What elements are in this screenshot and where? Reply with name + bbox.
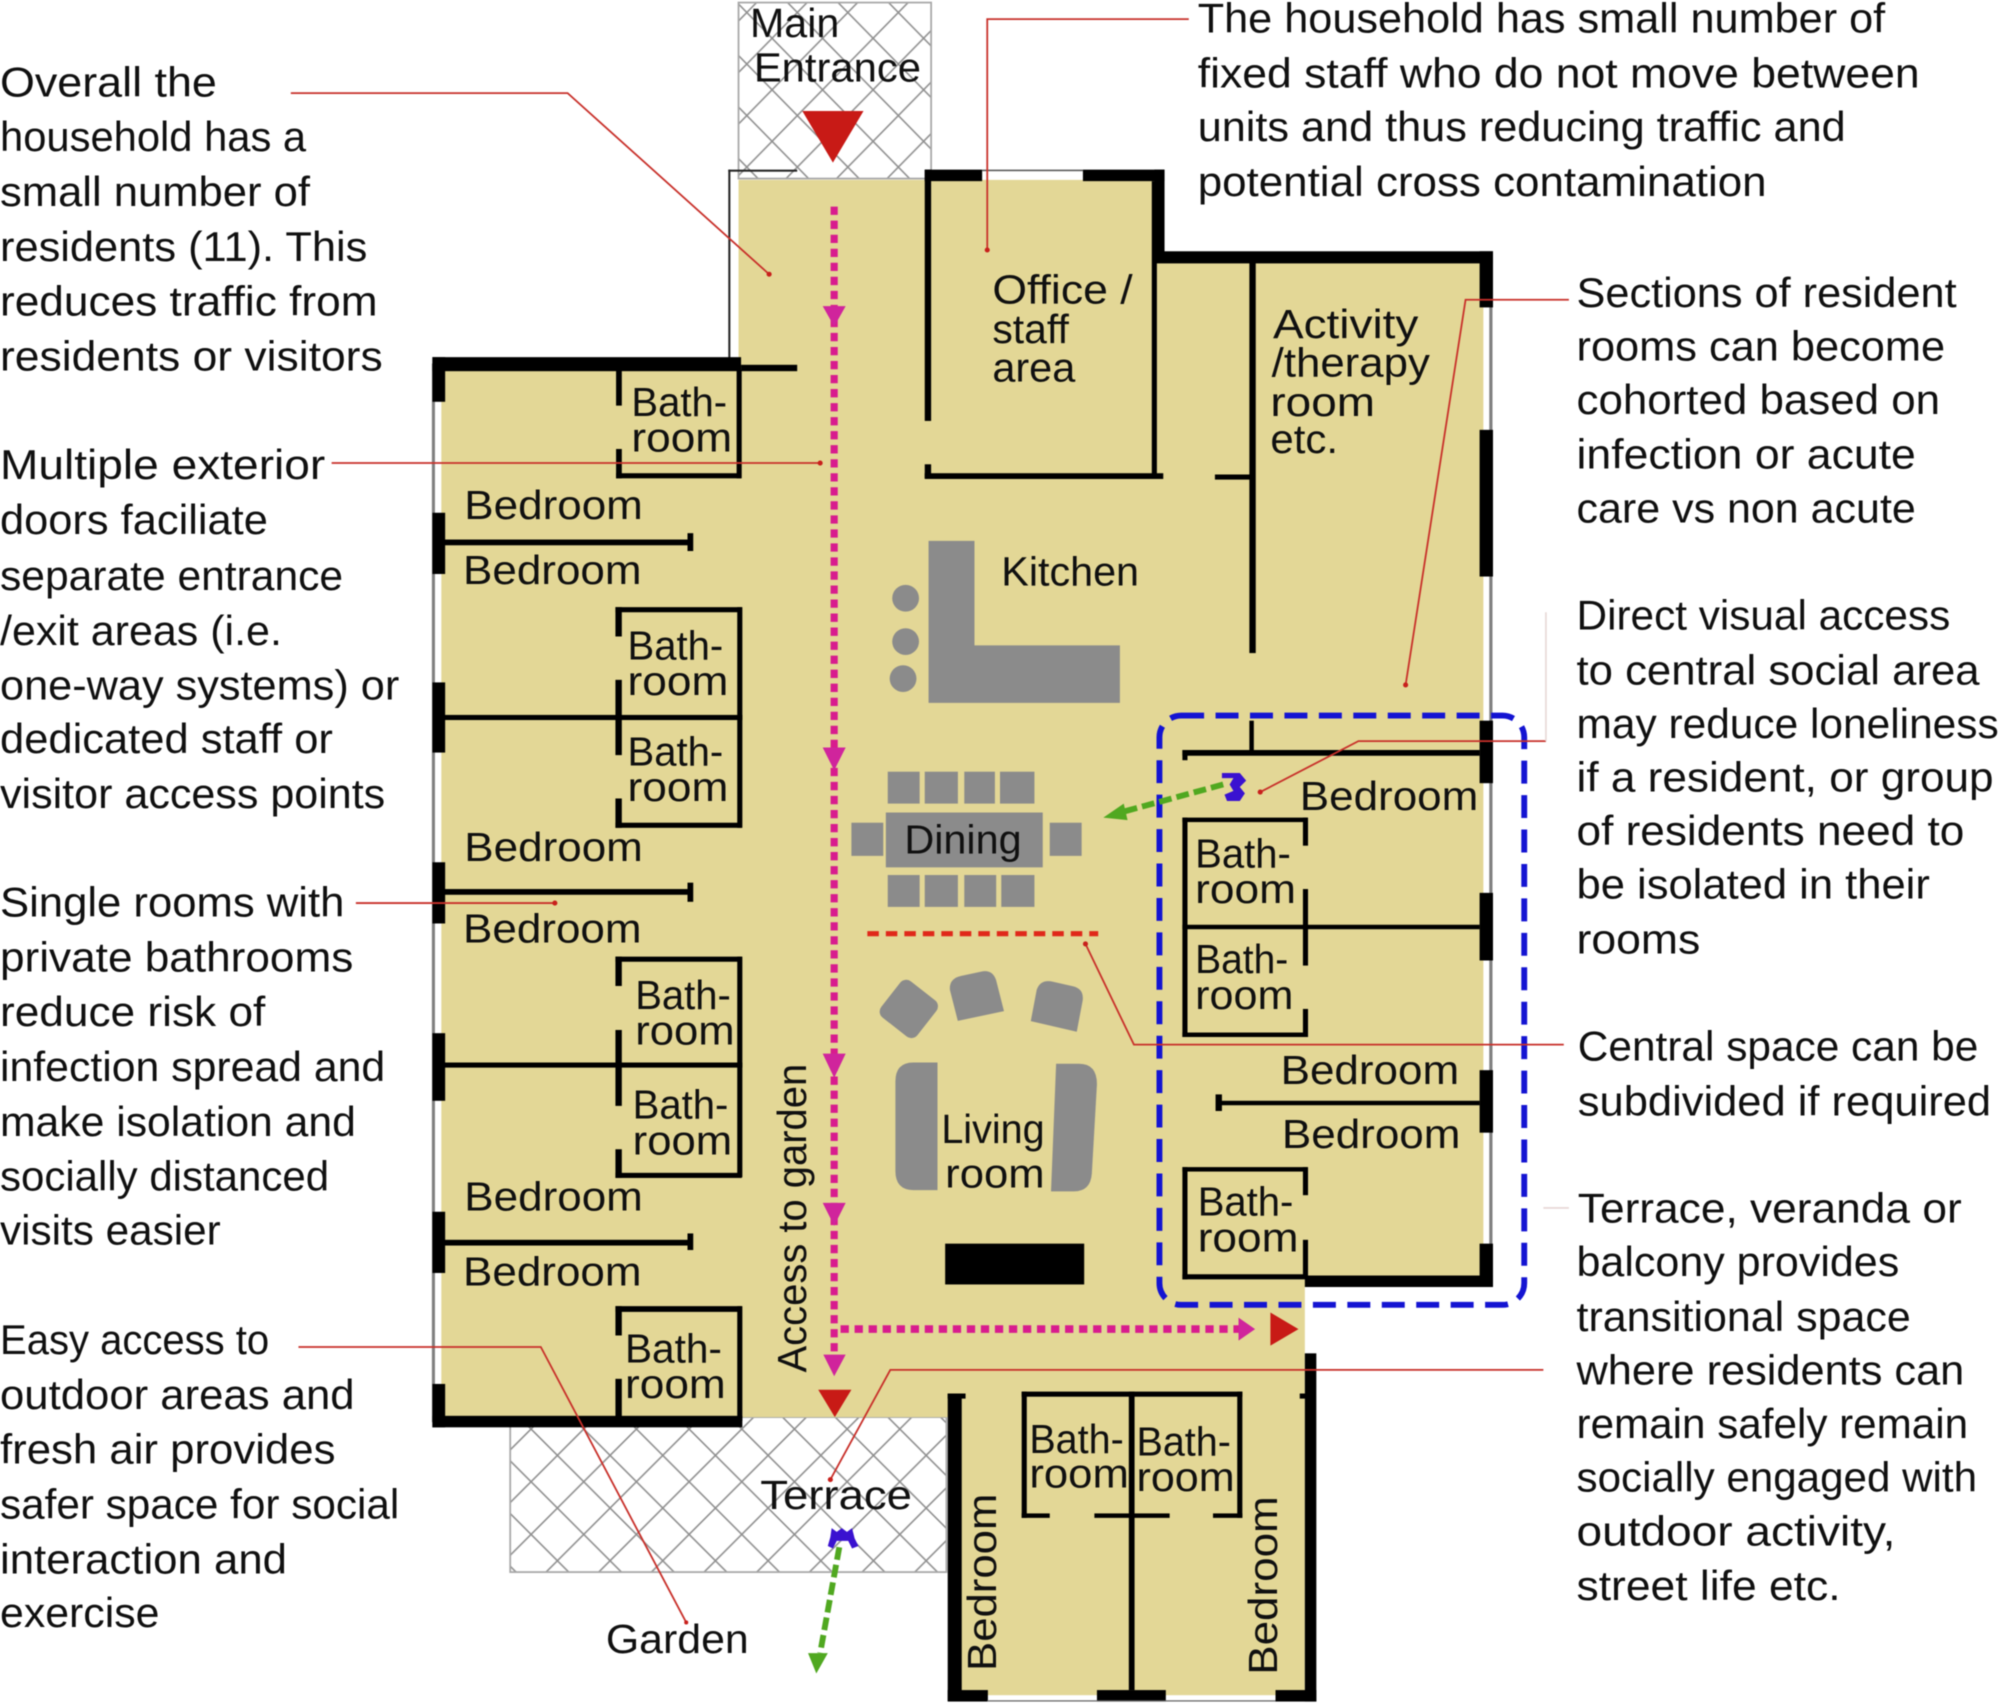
annotation: multiple exterior doors: doors faciliate <box>0 496 268 543</box>
bottom wing bedroom labels: Bedroom <box>1240 1496 1286 1675</box>
living room label: Living <box>941 1106 1045 1152</box>
activity room label: etc. <box>1270 416 1338 462</box>
activity room label: Activity <box>1273 301 1419 347</box>
left wing bathroom walls <box>615 370 742 1421</box>
annotation: central space <box>1578 1023 1991 1124</box>
office label <box>992 267 1133 390</box>
dining label: Dining <box>904 816 1022 862</box>
annotation: fixed staff: potential cross contamination <box>1198 158 1767 205</box>
left wing bathroom labels: room <box>628 658 728 704</box>
left wing exterior walls <box>432 357 797 1427</box>
annotation: terrace: socially engaged with <box>1577 1454 1977 1501</box>
circulation route to garden <box>823 207 1255 1376</box>
red entry and exit arrows <box>802 111 1298 1417</box>
left wing bathroom labels: room <box>625 1361 726 1407</box>
annotation: small number of residents: residents (11). This <box>0 223 367 270</box>
activity room walls <box>1215 263 1256 653</box>
right wing bedroom labels: Bedroom <box>1300 773 1478 819</box>
left wing bedroom labels <box>463 482 643 1295</box>
annotation: cohorted sections: cohorted based on <box>1577 376 1940 423</box>
right wing bathroom labels: room <box>1195 972 1293 1018</box>
office label: area <box>992 344 1076 390</box>
callout leader lines <box>291 19 1569 1622</box>
annotation: outdoor access: interaction and <box>0 1535 287 1582</box>
annotation: single rooms: Single rooms with <box>0 878 344 925</box>
left wing bathroom labels: Bath- <box>625 1325 722 1371</box>
left wing bathroom labels: Bath- <box>628 622 723 668</box>
annotation: terrace: outdoor activity, <box>1577 1507 1895 1554</box>
right wing bathroom labels: room <box>1198 1214 1298 1260</box>
annotation: fixed staff: units and thus reducing traffic and <box>1198 103 1846 150</box>
living room label: room <box>945 1151 1045 1197</box>
annotation: terrace: street life etc. <box>1577 1562 1841 1609</box>
annotation: single rooms <box>0 878 385 1253</box>
bottom wing bathroom labels <box>1029 1416 1235 1500</box>
access to garden label: Access to garden <box>769 1064 815 1372</box>
terrace hatched area <box>510 1417 946 1572</box>
annotation: outdoor access <box>0 1316 399 1636</box>
annotation: terrace: balcony provides <box>1577 1238 1899 1285</box>
annotation: single rooms: socially distanced <box>0 1153 329 1200</box>
annotation: cohorted sections <box>1577 269 1957 531</box>
annotation: terrace <box>1576 1185 1977 1609</box>
annotation: multiple exterior doors <box>0 441 399 817</box>
living room seating <box>877 969 1097 1191</box>
annotation: cohorted sections: infection or acute <box>1577 431 1916 478</box>
annotation: direct visual access: to central social area <box>1577 646 1980 693</box>
annotation: single rooms: private bathrooms <box>0 933 353 980</box>
living room label <box>941 1106 1045 1197</box>
bottom wing bathroom labels: room <box>1029 1450 1129 1496</box>
annotation: cohorted sections: rooms can become <box>1577 322 1945 369</box>
activity room label <box>1270 301 1430 462</box>
left wing bathroom labels: Bath- <box>631 379 727 425</box>
annotation: direct visual access: rooms <box>1577 915 1700 962</box>
annotation: outdoor access: fresh air provides <box>0 1426 335 1473</box>
cohort zone dashed outline <box>1159 716 1524 1305</box>
annotation: fixed staff <box>1198 0 1920 205</box>
annotation: small number of residents <box>0 58 383 380</box>
activity room label: room <box>1270 379 1375 425</box>
main entrance label: Entrance <box>754 45 921 91</box>
left wing bathroom labels: Bath- <box>628 728 723 774</box>
annotation: cohorted sections: care vs non acute <box>1577 484 1916 531</box>
leader: outdoor access <box>298 1347 686 1622</box>
kitchen counter and stools <box>890 541 1120 703</box>
leader: resident numbers <box>291 93 769 274</box>
bottom wing walls <box>948 1353 1316 1702</box>
right wing bathroom labels: Bath- <box>1195 936 1288 982</box>
floor plan <box>432 3 1524 1702</box>
annotation: terrace: where residents can <box>1576 1347 1964 1394</box>
annotation: small number of residents: residents or visitors <box>0 333 383 380</box>
office label: Office / <box>992 267 1133 313</box>
annotation: direct visual access: be isolated in their <box>1577 861 1930 908</box>
kitchen label: Kitchen <box>1001 548 1139 594</box>
annotation: single rooms: infection spread and <box>0 1043 385 1090</box>
walls <box>432 170 1493 1702</box>
resident view icon and sight arrow to garden <box>808 1528 858 1673</box>
right wing bathroom labels: Bath- <box>1195 830 1291 876</box>
right wing bedroom labels: Bedroom <box>1282 1111 1460 1157</box>
bottom wing bedroom labels <box>959 1494 1286 1675</box>
building floor area <box>441 180 1483 1696</box>
left wing bedroom labels: Bedroom <box>464 1173 643 1219</box>
bottom wing bathroom labels: room <box>1136 1454 1235 1500</box>
subdivision dashed line <box>867 932 1098 936</box>
garden label: Garden <box>606 1616 749 1662</box>
leader: fixed staff <box>987 19 1189 250</box>
annotation: direct visual access: may reduce loneliness <box>1577 700 1999 747</box>
right wing bathroom labels <box>1195 830 1298 1260</box>
annotation: multiple exterior doors: visitor access points <box>0 770 385 817</box>
annotation: small number of residents: reduces traffic from <box>0 278 378 325</box>
annotation: direct visual access: of residents need to <box>1577 807 1964 854</box>
left wing bathroom labels: room <box>635 1008 735 1054</box>
television unit <box>945 1244 1084 1284</box>
annotation: multiple exterior doors: separate entrance <box>0 552 343 599</box>
leader: cohorted sections <box>1406 300 1569 685</box>
annotation: outdoor access: Easy access to <box>0 1316 269 1363</box>
annotation: direct visual access: Direct visual access <box>1577 591 1950 638</box>
left wing bathroom labels: room <box>631 415 732 461</box>
annotation: multiple exterior doors: /exit areas (i.e. <box>0 607 282 654</box>
bottom wing bathroom labels: Bath- <box>1136 1418 1231 1464</box>
annotation: multiple exterior doors: dedicated staff or <box>0 715 333 762</box>
annotation: single rooms: reduce risk of <box>0 988 266 1035</box>
main entrance label <box>750 0 921 91</box>
left wing bedroom labels: Bedroom <box>464 482 643 528</box>
annotation: small number of residents: small number of <box>0 168 310 215</box>
annotation: terrace: remain safely remain <box>1577 1400 1968 1447</box>
annotation: small number of residents: Overall the <box>0 58 217 105</box>
left wing bathroom labels <box>625 379 735 1407</box>
leader: terrace <box>830 1370 1543 1480</box>
annotation: central space: subdivided if required <box>1578 1077 1991 1124</box>
left wing bedroom labels: Bedroom <box>464 824 643 870</box>
room labels <box>463 0 1478 1675</box>
left wing bathroom labels: Bath- <box>633 1082 728 1128</box>
right wing bathroom labels: room <box>1195 866 1296 912</box>
terrace label: Terrace <box>760 1472 912 1518</box>
bottom wing bathroom labels: Bath- <box>1029 1416 1124 1462</box>
left wing bathroom labels: room <box>628 764 728 810</box>
annotation: multiple exterior doors: Multiple exterior <box>0 441 325 488</box>
right wing partitions and bathrooms <box>1182 721 1480 1279</box>
left wing partitions <box>444 533 742 1250</box>
annotation: cohorted sections: Sections of resident <box>1577 269 1957 316</box>
leader: exterior doors <box>332 462 820 464</box>
leader: single rooms <box>356 902 555 904</box>
annotation: central space: Central space can be <box>1578 1023 1978 1070</box>
dining table and chairs <box>851 772 1082 907</box>
left wing bedroom labels: Bedroom <box>463 906 642 952</box>
annotation: fixed staff: fixed staff who do not move between <box>1198 49 1920 96</box>
annotation: multiple exterior doors: one-way systems) or <box>0 662 399 709</box>
annotation: small number of residents: household has a <box>0 113 307 160</box>
left wing bedroom labels: Bedroom <box>463 1249 642 1295</box>
annotation: terrace: transitional space <box>1577 1293 1911 1340</box>
annotation: direct visual access <box>1577 591 1999 962</box>
resident view icon and sight arrow to dining <box>1103 773 1246 820</box>
left wing bathroom labels: room <box>633 1117 732 1163</box>
main entrance hatched porch <box>739 3 931 179</box>
main entrance label: Main <box>750 0 839 46</box>
right wing bedroom labels: Bedroom <box>1281 1047 1459 1093</box>
bottom wing bedroom labels: Bedroom <box>959 1494 1005 1671</box>
right wing exterior walls <box>1154 251 1493 1287</box>
leader: visual access <box>1260 741 1546 792</box>
leader: central space subdivided <box>1085 944 1564 1045</box>
annotation: single rooms: visits easier <box>0 1206 221 1253</box>
activity room label: /therapy <box>1272 339 1430 385</box>
left wing bedroom labels: Bedroom <box>463 547 642 593</box>
office walls <box>925 170 1165 479</box>
annotation: single rooms: make isolation and <box>0 1098 356 1145</box>
right wing bedroom labels <box>1281 773 1478 1157</box>
annotation: direct visual access: if a resident, or group <box>1577 753 1994 800</box>
leader end dots <box>552 247 1408 1625</box>
exterior windows <box>432 170 1492 1700</box>
left wing bathroom labels: Bath- <box>635 972 731 1018</box>
annotation: outdoor access: safer space for social <box>0 1481 399 1528</box>
office label: staff <box>992 306 1070 352</box>
annotation: outdoor access: exercise <box>0 1589 159 1636</box>
annotation: outdoor access: outdoor areas and <box>0 1371 355 1418</box>
right wing bathroom labels: Bath- <box>1198 1179 1293 1225</box>
annotation: terrace: Terrace, veranda or <box>1578 1185 1962 1232</box>
